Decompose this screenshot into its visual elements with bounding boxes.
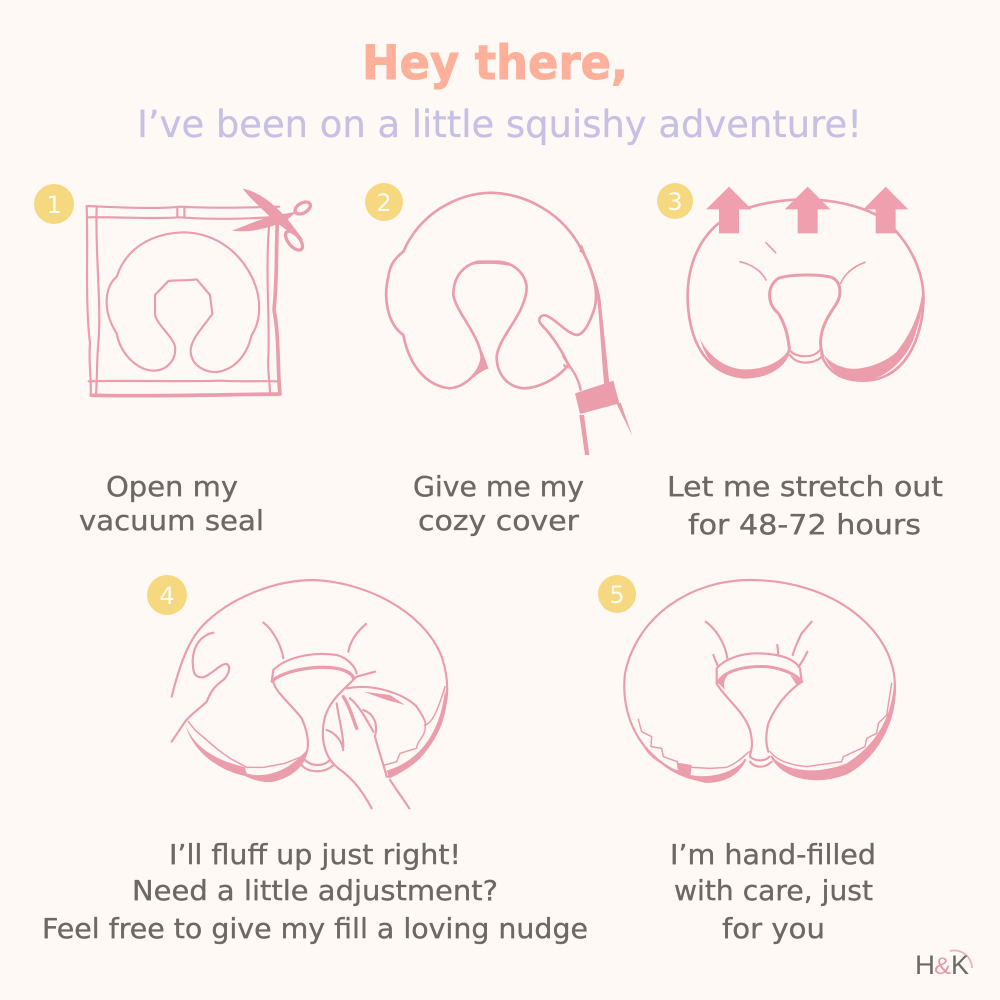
step 3 caption: Let me stretch out xyxy=(667,470,943,503)
bottom shading xyxy=(640,683,895,782)
cover strap xyxy=(582,250,609,383)
logo: H xyxy=(915,950,935,980)
subtitle: I’ve been on a little squishy adventure! xyxy=(137,103,862,146)
bottom shading xyxy=(700,283,924,381)
step 5 badge: 5 xyxy=(609,581,625,609)
logo: & xyxy=(934,953,951,980)
logo: K xyxy=(951,950,969,980)
step 4 caption: Need a little adjustment? xyxy=(132,874,498,907)
step 4 caption: I’ll fluff up just right! xyxy=(169,838,461,871)
step 3 illustration: expanding pillow xyxy=(688,187,924,381)
wrinkles xyxy=(740,243,865,283)
step 1 caption xyxy=(79,470,264,537)
step 3 caption: for 48-72 hours xyxy=(688,508,921,541)
lace seam xyxy=(188,687,445,767)
pillow outline xyxy=(624,580,895,782)
neck hole and collar xyxy=(263,623,366,682)
step 1 caption: Open my xyxy=(106,470,238,503)
neck hole and collar xyxy=(706,622,812,683)
step 5 caption: for you xyxy=(722,912,825,945)
step 4 badge: 4 xyxy=(159,582,175,610)
step 2 badge: 2 xyxy=(376,189,392,217)
step 5 illustration: finished pillow xyxy=(624,580,895,782)
step 5 caption: I’m hand-filled xyxy=(670,838,876,871)
inner hole xyxy=(770,275,840,357)
bottom shading xyxy=(185,690,446,782)
step 2 caption: Give me my xyxy=(413,470,584,503)
step 5 caption xyxy=(670,838,876,945)
step 5 badge xyxy=(598,575,636,613)
vacuum bag xyxy=(87,206,280,396)
step 3 badge: 3 xyxy=(667,188,683,216)
arm xyxy=(563,357,581,390)
shading wedges xyxy=(463,244,586,385)
title: Hey there, xyxy=(362,36,628,91)
step 1 badge: 1 xyxy=(46,191,62,219)
pillow outline xyxy=(386,193,596,388)
right hand lifting fabric xyxy=(323,672,425,808)
step 4 badge xyxy=(147,575,187,615)
step 1 caption: vacuum seal xyxy=(79,504,264,537)
step 1 badge xyxy=(34,184,74,224)
step 3 badge xyxy=(657,183,693,219)
step 2 illustration: sliding on the cover xyxy=(386,193,633,455)
pillow outline xyxy=(172,580,447,777)
step 2 caption: cozy cover xyxy=(418,504,580,537)
step 2 badge xyxy=(365,183,403,221)
step 2 caption xyxy=(413,470,584,537)
step 4 illustration: hands fluffing the pillow xyxy=(172,580,447,808)
lace seam xyxy=(638,683,892,768)
pillow outline xyxy=(107,232,259,372)
step 1 illustration: pillow in vacuum bag with scissors xyxy=(87,189,312,396)
step 4 caption: Feel free to give my fill a loving nudge xyxy=(42,912,588,945)
scissors xyxy=(232,189,312,253)
left hand xyxy=(172,633,229,742)
pillow outline xyxy=(688,199,923,381)
step 3 caption xyxy=(667,470,943,541)
step 4 caption xyxy=(42,838,588,945)
arrows up xyxy=(706,187,908,233)
wrist band xyxy=(575,381,619,414)
logo xyxy=(915,950,972,980)
step 5 caption: with care, just xyxy=(674,874,873,907)
